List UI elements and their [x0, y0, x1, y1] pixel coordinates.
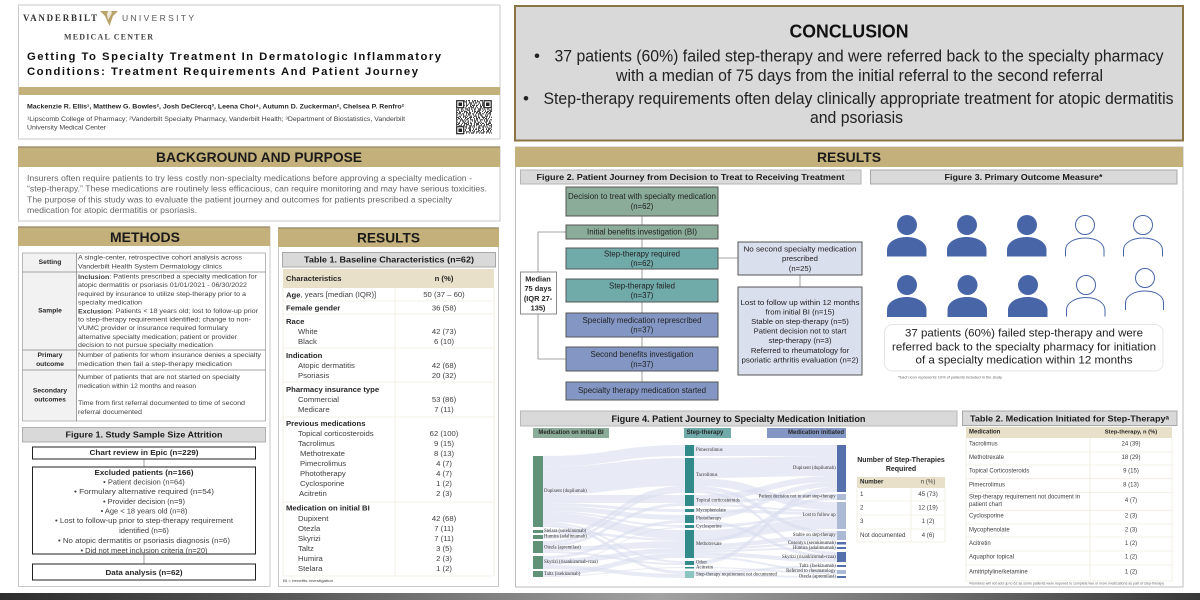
- sankey labels: medication initiated: Otezla (apremilast): [799, 574, 836, 580]
- table 2: medication initiated for step-therapy: [962, 411, 1177, 586]
- callout: primary outcome statement: referred back to the specialty pharmacy for initiation: [892, 341, 1156, 353]
- panel: results baseline: [278, 228, 499, 586]
- sankey labels: step-therapy: Topical corticosteroids: [696, 498, 740, 504]
- sankey column headers: Medication initiated: [788, 430, 844, 436]
- table 1: baseline characteristics: 20 (32): [432, 371, 457, 380]
- methods table: [22, 253, 266, 421]
- table 1: baseline characteristics: 42 (68): [432, 361, 457, 370]
- flow box: reasons: Patient decision not to start: [754, 326, 847, 336]
- bullets: and psoriasis: [810, 108, 903, 127]
- flow box: step-therapy required: Step-therapy required: [604, 250, 680, 258]
- panel: results main: [515, 147, 1183, 587]
- table 1: baseline characteristics: Medication on initial BI: [286, 504, 370, 512]
- table 1: baseline characteristics: Humira: [298, 554, 323, 563]
- box: excluded patients: • Lost to follow-up prior to step-therapy requirement: [55, 516, 234, 525]
- table 1: baseline characteristics: Race: [286, 317, 305, 326]
- table 1: baseline characteristics: Tacrolimus: [298, 439, 335, 448]
- text block: “step-therapy.” These medications are routinely less efficacious, can require monitoring and may have serious toxicities.: [27, 185, 487, 194]
- table 2: medication initiated for step-therapy: 24 (39): [1121, 441, 1141, 447]
- table 2: medication initiated for step-therapy: Step-therapy, n (%): [1105, 429, 1157, 435]
- table 1: baseline characteristics: 3 (5): [436, 544, 452, 553]
- table 1: baseline characteristics: Age, years [median (IQR)]: [286, 290, 376, 299]
- affiliations: ¹Lipscomb College of Pharmacy; ²Vanderbilt Specialty Pharmacy, Vanderbilt Health; ³Department of Biostatistics, Vanderbilt: [27, 117, 405, 123]
- sankey labels: initial medication: Stelara (ustekinumab): [544, 529, 587, 534]
- sankey labels: medication initiated: Stable on step-therapy: [793, 533, 836, 538]
- methods table: medication within 12 months and reason: [78, 383, 196, 390]
- sankey labels: step-therapy: Tacrolimus: [696, 473, 718, 478]
- flow box: step-therapy failed: [566, 279, 718, 302]
- callout: primary outcome statement: 37 patients (60%) failed step-therapy and were: [905, 327, 1143, 339]
- icon: outlined person: [1066, 276, 1105, 316]
- methods table: Number of patients that are not started on specialty: [78, 374, 241, 381]
- flow box: reasons: [738, 287, 862, 375]
- table 1: baseline characteristics: 4 (7): [436, 469, 452, 478]
- flow box: reasons: Referred to rheumatology for: [751, 346, 850, 355]
- flow box: no second medication: [738, 242, 862, 275]
- panel: background and purpose: [18, 146, 500, 221]
- sankey labels: step-therapy: [696, 448, 777, 578]
- table 2: medication initiated for step-therapy: Amitriptyline/ketamine: [969, 569, 1028, 575]
- table 2: medication initiated for step-therapy: Pimecrolimus: [969, 482, 1005, 488]
- sankey flows: step-therapy to medication initiated: [694, 445, 837, 578]
- table 1: baseline characteristics: Medicare: [298, 405, 330, 414]
- sankey column headers: Medication on initial BI: [538, 430, 604, 436]
- sankey labels: initial medication: Otezla (apremilast): [544, 546, 581, 550]
- table 1 title: [282, 252, 496, 267]
- callout: median days: 135): [531, 304, 546, 312]
- figure 2: patient journey flowchart: [520, 170, 862, 400]
- sankey labels: step-therapy: Other: [696, 560, 707, 566]
- box: excluded patients: • Provider decision (n=9): [103, 497, 186, 506]
- icon: filled person: [1008, 275, 1048, 317]
- table 1: baseline characteristics: Topical corticosteroids: [298, 429, 374, 438]
- panel: methods: [18, 226, 270, 586]
- methods table: A single-center, retrospective cohort analysis across: [78, 254, 243, 262]
- table 1: baseline characteristics: [283, 269, 494, 576]
- figure 4: patient journey sankey: [520, 411, 957, 580]
- box: data analysis: Data analysis (n=62): [106, 568, 183, 577]
- icon: filled person: [1007, 215, 1046, 256]
- heading: BACKGROUND AND PURPOSE: [156, 149, 362, 165]
- bullets: with a median of 75 days from the initial referral to the second referral: [615, 66, 1103, 85]
- table 1: baseline characteristics: 7 (11): [434, 405, 454, 414]
- sankey labels: initial medication: [544, 489, 598, 577]
- table 2: medication initiated for step-therapy: patient chart: [969, 502, 1002, 508]
- table 2: medication initiated for step-therapy: Medication: [969, 429, 1001, 435]
- box: data analysis: [32, 564, 256, 580]
- table: number of step-therapies required: 3: [860, 518, 864, 525]
- box: excluded patients: • Patient decision (n=64): [103, 478, 185, 486]
- icon: outlined person: [1126, 268, 1164, 310]
- table 1: baseline characteristics: White: [298, 327, 318, 336]
- callout: primary outcome statement: of a specialty medication within 12 months: [916, 355, 1133, 367]
- table: number of step-therapies required: Number of Step-Therapies: [857, 457, 945, 464]
- figure 1: study sample size attrition: Figure 1. Study Sample Size Attrition: [66, 430, 223, 440]
- table 1: baseline characteristics: 42 (68): [432, 514, 457, 523]
- icon: outlined person: [1066, 216, 1104, 256]
- flow box: represcribed: Specialty medication represcribed: [582, 316, 702, 325]
- methods table: outcomes: [34, 396, 66, 404]
- methods table: Primary: [38, 352, 63, 359]
- methods table: decision to not pursue specialty medication: [78, 342, 213, 349]
- table 2: medication initiated for step-therapy: Methotrexate: [969, 455, 1005, 461]
- flow box: reasons: psoriatic arthritis evaluation (n=2): [742, 356, 859, 364]
- table: number of step-therapies required: 1 (2): [922, 518, 934, 525]
- sankey nodes: step-therapy: [685, 445, 694, 578]
- logo: Vanderbilt University Medical Center: MEDICAL CENTER: [64, 32, 153, 42]
- table 2: medication initiated for step-therapy: 2 (3): [1125, 527, 1137, 533]
- box: excluded patients: [32, 467, 256, 555]
- table 2: medication initiated for step-therapy: Topical Corticosteroids: [969, 469, 1029, 475]
- bullets: •: [523, 89, 529, 108]
- figure 3: primary outcome measure: Figure 3. Primary Outcome Measure*: [944, 173, 1103, 182]
- methods table: Secondary: [33, 388, 67, 394]
- bullets: 37 patients (60%) failed step-therapy and were referred back to the specialty pharmacy: [554, 46, 1164, 66]
- flow box: represcribed: [566, 313, 718, 337]
- sankey labels: step-therapy: Phototherapy: [696, 516, 722, 522]
- poster title: Conditions: Treatment Requirements And Patient Journey: [27, 66, 419, 78]
- flow box: decision: [566, 187, 718, 216]
- table 2: medication initiated for step-therapy: Acitretin: [969, 541, 991, 547]
- table 1 title: Table 1. Baseline Characteristics (n=62): [304, 256, 474, 264]
- table 2: medication initiated for step-therapy: Aquaphor topical: [969, 555, 1014, 561]
- icon: filled person: [887, 275, 926, 317]
- table: number of step-therapies required: n (%): [921, 478, 935, 486]
- text block: Insurers often require patients to try less costly non-specialty medications before approving a specialty medication -: [27, 174, 472, 183]
- logo: Vanderbilt University Medical Center: UNIVERSITY: [122, 13, 194, 23]
- flow box: no second medication: (n=25): [789, 264, 812, 273]
- methods table: VUMC provider or insurance required formulary: [78, 325, 229, 332]
- table 1: baseline characteristics: Indication: [286, 351, 323, 360]
- icon: filled person: [948, 275, 987, 317]
- flow box: therapy started: Specialty therapy medication started: [578, 386, 706, 395]
- sankey labels: medication initiated: Cosentyx (secukinumab): [788, 541, 836, 546]
- flow box: represcribed: (n=37): [631, 326, 654, 334]
- box: excluded patients: • Formulary alternative required (n=54): [74, 487, 215, 496]
- flow box: reasons: Stable on step-therapy (n=5): [751, 317, 849, 326]
- sankey column headers: Step-therapy: [687, 430, 724, 436]
- sankey labels: medication initiated: [759, 466, 836, 580]
- table 2: medication initiated for step-therapy: 9 (15): [1123, 469, 1139, 475]
- table 2: medication initiated for step-therapy: 1 (2): [1125, 555, 1137, 561]
- table 2: medication initiated for step-therapy: 4 (7): [1125, 498, 1137, 504]
- table 1: baseline characteristics: Pharmacy insurance type: [286, 385, 380, 394]
- table 1: baseline characteristics: 2 (3): [436, 489, 452, 498]
- flow box: step-therapy failed: (n=37): [631, 291, 654, 300]
- methods table: atopic dermatitis or psoriasis 01/01/2021 - 06/30/2022: [78, 282, 247, 289]
- table 1: baseline characteristics: 2 (3): [436, 554, 452, 563]
- sankey labels: initial medication: Taltz (ixekizumab): [544, 572, 581, 577]
- flow box: step-therapy required: (n=62): [631, 259, 654, 268]
- text block: The purpose of this study was to evaluate the patient journey and outcomes for patients prescribed a specialty: [27, 195, 453, 204]
- flow box: second BI: (n=37): [631, 360, 654, 369]
- figure 2: patient journey flowchart: Figure 2. Patient Journey from Decision to Treat to Receiving Treatment: [536, 173, 845, 182]
- table 1: baseline characteristics: 7 (11): [434, 524, 454, 533]
- table 1: baseline characteristics: Methotrexate: [300, 449, 345, 458]
- table 1: baseline characteristics: Psoriasis: [298, 371, 329, 380]
- methods table: required by insurance to utilize step-therapy prior to a: [78, 291, 246, 298]
- table 1: baseline characteristics: 62 (100): [430, 429, 459, 438]
- icon: filled person: [947, 215, 986, 256]
- icon: QR code: [456, 100, 492, 134]
- icon: filled person: [887, 215, 926, 256]
- heading: CONCLUSION: [790, 20, 908, 42]
- flow box: initial BI: [566, 225, 718, 239]
- table 1: baseline characteristics: 53 (86): [432, 395, 457, 404]
- poster title: Getting To Specialty Treatment In Dermatologic Inflammatory: [27, 51, 442, 63]
- box: excluded patients: • Age < 18 years old (n=8): [101, 506, 188, 516]
- table 1: baseline characteristics: 36 (58): [432, 304, 457, 312]
- flow box: step-therapy required: [566, 248, 718, 269]
- flow box: decision: Decision to treat with specialty medication: [568, 192, 716, 201]
- sankey nodes: medication initiated: [837, 445, 846, 578]
- table 1: baseline characteristics: 6 (10): [434, 337, 454, 346]
- methods table: alternative specialty medication; patient or provider: [78, 334, 238, 341]
- sankey labels: step-therapy: Mycophenolate: [696, 508, 726, 514]
- table 1: baseline characteristics: 4 (7): [436, 459, 452, 468]
- table 2: medication initiated for step-therapy: Tacrolimus: [969, 441, 998, 447]
- box: excluded patients: • No atopic dermatitis or psoriasis diagnosis (n=6): [58, 536, 231, 545]
- sankey labels: medication initiated: Humira (adalimumab): [793, 546, 836, 551]
- table 1: baseline characteristics: Phototherapy: [300, 469, 346, 478]
- table 1: baseline characteristics: Dupixent: [298, 514, 329, 523]
- flow box: initial BI: Initial benefits investigation (BI): [587, 228, 697, 236]
- table 1: baseline characteristics: 7 (11): [434, 534, 454, 543]
- figure 4: patient journey sankey: Figure 4. Patient Journey to Specialty Medication Initiation: [612, 414, 866, 424]
- bullets: •: [534, 46, 540, 66]
- methods table: medication then fail a step-therapy medication: [78, 361, 232, 368]
- footer bar: [0, 593, 1200, 600]
- table: number of step-therapies required: Not documented: [860, 532, 906, 539]
- table: number of step-therapies required: Required: [886, 466, 916, 473]
- sankey labels: medication initiated: Referred to rheumatology: [786, 569, 836, 574]
- sankey nodes: initial medication: [533, 456, 543, 577]
- sankey labels: initial medication: Humira (adalimumab): [544, 534, 587, 540]
- sankey labels: step-therapy: Acitretin: [696, 566, 714, 570]
- bullets: [523, 46, 1174, 127]
- callout: median days: Median: [525, 274, 551, 284]
- table 1: baseline characteristics: Taltz: [298, 544, 314, 553]
- logo: Vanderbilt University Medical Center: VANDERBILT: [23, 13, 97, 23]
- table: number of step-therapies required: 45 (73): [918, 491, 938, 498]
- methods table: outcome: [36, 361, 64, 368]
- flow box: decision: (n=62): [631, 202, 654, 211]
- flow box: therapy started: [566, 382, 718, 400]
- sankey column headers: [533, 428, 846, 438]
- affiliations: University Medical Center: [27, 126, 106, 132]
- flow box: step-therapy failed: Step-therapy failed: [609, 282, 675, 290]
- methods table: Setting: [39, 259, 61, 266]
- table 1: baseline characteristics: Commercial: [298, 395, 339, 404]
- sankey labels: step-therapy: Step-therapy requirement not documented: [696, 572, 777, 578]
- methods table: referral documented: [78, 409, 142, 416]
- flow box: reasons: Lost to follow up within 12 months: [740, 298, 860, 307]
- sankey labels: medication initiated: Skyrizi (risankizumab-rzaa): [782, 555, 836, 560]
- sankey labels: initial medication: Skyrizi (risankizumab-rzaa): [544, 560, 598, 565]
- table 2: medication initiated for step-therapy: 1 (2): [1125, 569, 1137, 575]
- text block: [27, 174, 487, 215]
- table 1: baseline characteristics: Characteristics: [286, 274, 342, 283]
- table: number of step-therapies required: 4 (6): [922, 532, 934, 539]
- table 1: baseline characteristics: Stelara: [298, 564, 323, 573]
- methods table: Number of patients for whom insurance denies a specialty: [78, 352, 262, 359]
- table 1: baseline characteristics: Cyclosporine: [300, 479, 344, 488]
- sankey labels: medication initiated: Patient decision not to start step-therapy: [759, 494, 836, 500]
- heading: RESULTS: [817, 149, 881, 165]
- table 1: baseline characteristics: n (%): [435, 274, 454, 283]
- table footnote: BI = benefits investigation: [283, 579, 333, 583]
- table 1: baseline characteristics: 1 (2): [436, 564, 452, 573]
- sankey labels: medication initiated: Lost to follow up: [803, 513, 836, 518]
- sankey labels: medication initiated: Dupixent (dupilumab): [793, 466, 836, 471]
- table 2: medication initiated for step-therapy: Step-therapy requirement not document in: [969, 495, 1080, 501]
- table 1: baseline characteristics: Acitretin: [299, 489, 327, 498]
- figure 3: primary outcome measure: [870, 170, 1177, 380]
- methods table: Inclusion : Patients prescribed a specialty medication for: [78, 274, 258, 280]
- methods table: Sample: [38, 308, 62, 314]
- methods table: specialty medication: [78, 300, 142, 306]
- callout: median days: (IQR 27-: [524, 294, 553, 303]
- table: number of step-therapies required: 2: [860, 504, 864, 512]
- flow box: reasons: step-therapy (n=3): [768, 336, 832, 345]
- affiliations: [27, 117, 405, 132]
- table 1: baseline characteristics: 8 (13): [434, 449, 454, 458]
- callout: median days: [520, 272, 556, 314]
- text block: medication for atopic dermatitis or psoriasis.: [27, 206, 197, 215]
- flow box: reasons: from initial BI (n=15): [766, 308, 835, 316]
- table 1: baseline characteristics: 9 (15): [434, 439, 454, 448]
- poster title: [27, 51, 442, 78]
- table 2: medication initiated for step-therapy: Mycophenolate: [969, 527, 1010, 533]
- callout: median days: 75 days: [524, 284, 552, 293]
- heading: RESULTS: [357, 230, 420, 246]
- table 1: baseline characteristics: Previous medications: [286, 419, 365, 428]
- methods table: Vanderbilt Health System Dermatology clinics: [78, 264, 223, 270]
- panel: poster title header: [18, 5, 500, 139]
- sankey labels: step-therapy: Cyclosporine: [696, 524, 722, 530]
- table 1: baseline characteristics: Female gender: [286, 304, 340, 312]
- table: number of step-therapies required: [857, 457, 945, 542]
- table: number of step-therapies required: Number: [860, 478, 884, 486]
- sankey labels: initial medication: Dupixent (dupilumab): [544, 489, 587, 494]
- box: chart review: Chart review in Epic (n=229): [90, 448, 199, 457]
- table 1: baseline characteristics: Skyrizi: [298, 534, 321, 543]
- heading: METHODS: [110, 229, 180, 245]
- methods table: Exclusion : Patients < 18 years old; lost to follow-up prior: [78, 308, 259, 315]
- table 2: medication initiated for step-therapy: 1 (2): [1125, 541, 1137, 547]
- logo: Vanderbilt University Medical Center: [23, 11, 194, 42]
- callout: primary outcome statement: [884, 324, 1163, 371]
- flow box: second BI: Second benefits investigation: [590, 350, 694, 359]
- table 1: baseline characteristics: 42 (73): [432, 327, 457, 336]
- figure footnote: *Each icon represents 10% of patients included in the study: [898, 376, 1002, 380]
- box: chart review: [32, 447, 256, 459]
- methods table: to step-therapy requirement identified; change to non-: [78, 316, 251, 324]
- table: number of step-therapies required: 1: [860, 491, 864, 498]
- icon: outlined person: [1124, 216, 1162, 256]
- sankey labels: step-therapy: Methotrexate: [696, 542, 722, 547]
- table 2: medication initiated for step-therapy: 2 (3): [1125, 514, 1137, 520]
- flow box: second BI: [566, 347, 718, 371]
- sankey flows: initial medication to step-therapy: [543, 445, 685, 578]
- flow box: no second medication: prescribed: [782, 254, 818, 263]
- table 1: baseline characteristics: 50 (37 – 60): [423, 290, 465, 299]
- table 2: medication initiated for step-therapy: Cyclosporine: [969, 514, 1004, 520]
- flow box: no second medication: No second specialty medication: [744, 244, 856, 254]
- table 1: baseline characteristics: Atopic dermatitis: [298, 361, 355, 370]
- box: excluded patients: • Did not meet inclusion criteria (n=20): [80, 546, 208, 555]
- sankey labels: medication initiated: Taltz (Ixekizumab): [799, 564, 836, 569]
- sankey labels: step-therapy: Pimecrolimus: [696, 448, 723, 453]
- table: number of step-therapies required: 12 (19): [918, 504, 938, 512]
- panel: conclusion: [515, 6, 1183, 140]
- authors: Mackenzie R. Ellis¹, Matthew G. Bowles², Josh DeClercq³, Leena Choi⁴, Autumn D. Zuckerman², Chelsea P. Renfro²: [27, 104, 404, 110]
- table 1: baseline characteristics: Black: [298, 337, 317, 346]
- box: excluded patients: Excluded patients (n=166): [94, 468, 194, 477]
- table 1: baseline characteristics: 1 (2): [436, 479, 452, 488]
- table 2: medication initiated for step-therapy: 18 (29): [1121, 455, 1141, 461]
- table 1: baseline characteristics: Otezla: [298, 524, 321, 533]
- figure 1: study sample size attrition: [22, 428, 266, 580]
- table 2: medication initiated for step-therapy: 8 (13): [1123, 482, 1139, 488]
- table footnote: ᵃNumbers will not add up to 62 as some patients were required to complete two or more medications as part of step-therapy: [969, 582, 1164, 586]
- table 1: baseline characteristics: Pimecrolimus: [300, 459, 346, 468]
- methods table: Time from first referral documented to time of second: [78, 400, 245, 407]
- table 2: medication initiated for step-therapy: Table 2. Medication Initiated for Step-Therapyᵃ: [970, 414, 1170, 424]
- box: excluded patients: identified (n=6): [119, 526, 169, 535]
